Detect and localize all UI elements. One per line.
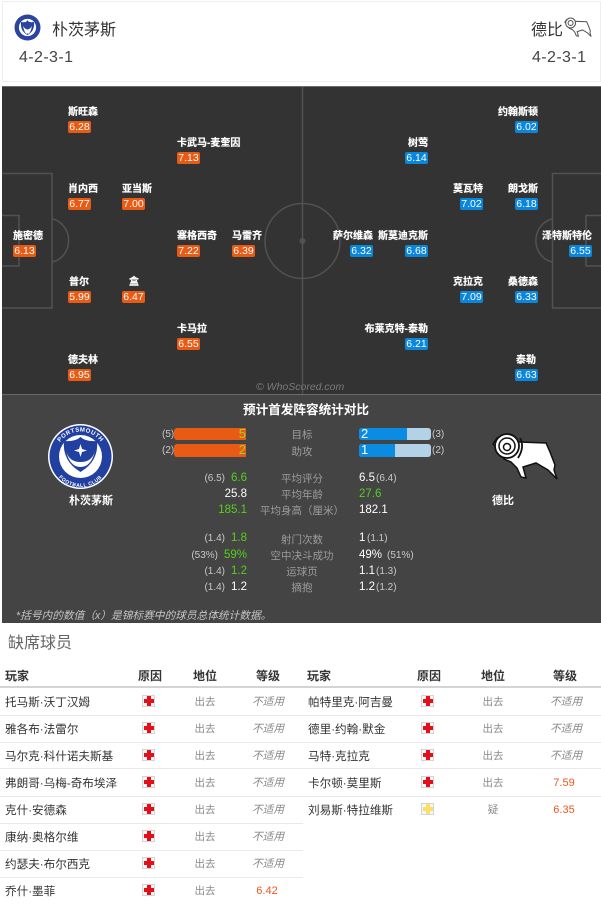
row: 帕特里克·阿吉曼: 不适用: [550, 696, 582, 708]
header: home table columns: [0, 662, 303, 688]
stat: dribbles: 1.2: [231, 565, 247, 577]
row: 约瑟夫·布尔西克: 出去: [194, 858, 216, 870]
player: 约翰斯顿: [498, 106, 538, 133]
stat: tackles: 摘抱: [292, 582, 312, 594]
row: 克什·安德森: 不适用: [252, 804, 284, 816]
row: 德里·约翰·默金: 出去: [482, 723, 504, 735]
row: 康纳·奥格尔维: 康纳·奥格尔维: [5, 831, 78, 844]
heading: stats title: 预计首发阵容统计对比: [243, 403, 369, 417]
player: 亚当斯: 7.00: [123, 198, 144, 210]
player: 卡马拉: 卡马拉: [177, 324, 207, 335]
row: 马尔克·科什诺夫斯基: [0, 742, 303, 769]
text: home formation: 4-2-3-1: [19, 49, 73, 66]
player: 施密德: 6.13: [14, 245, 35, 257]
row: 弗朗哥·乌梅-奇布埃泽: [0, 769, 303, 797]
panel: lineup stats comparison: [2, 395, 601, 623]
row: 帕特里克·阿吉曼: [303, 688, 601, 716]
stat: average rating: (6.4): [376, 473, 397, 484]
player: 施密德: [13, 230, 44, 257]
header cell: rating: 等级: [553, 669, 577, 683]
row: 马尔克·科什诺夫斯基: 出去: [194, 750, 216, 762]
player: 桑德森: 6.33: [516, 291, 537, 303]
player: 克拉克: [453, 276, 483, 303]
player: 斯莫迪克斯: 6.68: [406, 245, 427, 257]
player: 约翰斯顿: 6.02: [516, 121, 537, 133]
text: away formation: 4-2-3-1: [532, 49, 586, 66]
icon: Derby ram large: [492, 433, 558, 480]
row: 约瑟夫·布尔西克: 不适用: [252, 858, 284, 870]
player: 卡马拉: [177, 322, 208, 350]
row: 约瑟夫·布尔西克: [0, 850, 303, 878]
header cell: reason: 原因: [138, 669, 162, 683]
header: away table columns: [303, 662, 601, 688]
row: 乔什·墨菲: 出去: [194, 885, 216, 897]
player: 布莱克特-泰勒: [364, 322, 428, 350]
row: 克什·安德森: 克什·安德森: [5, 804, 67, 817]
text: home team label: 朴茨茅斯: [69, 495, 113, 507]
row: 弗朗哥·乌梅-奇布埃泽: 弗朗哥·乌梅-奇布埃泽: [5, 777, 117, 790]
player: 泰勒: [515, 354, 538, 381]
player: 肖内西: [68, 182, 98, 210]
row: 乔什·墨菲: 6.42: [256, 885, 278, 897]
player: 桑德森: 桑德森: [508, 277, 538, 288]
stat: dribbles: 1.1: [359, 565, 375, 577]
row: 雅各布·法雷尔: [0, 715, 303, 743]
row: 托马斯·沃丁汉姆: 出去: [194, 696, 216, 708]
row: 乔什·墨菲: 乔什·墨菲: [5, 885, 55, 898]
stat: average rating: (6.5): [204, 473, 225, 484]
stat: average rating: 6.6: [231, 472, 247, 484]
row: 刘易斯·特拉维斯: 刘易斯·特拉维斯: [308, 804, 393, 817]
panel: match header: [2, 1, 601, 82]
player: 塞格西奇: [177, 230, 217, 257]
stat: average height: 182.1: [359, 504, 388, 516]
player: 马雷齐: 6.39: [233, 245, 254, 257]
player: 普尔: [68, 276, 91, 303]
label: assists: 助攻: [292, 446, 312, 458]
row: 马特·克拉克: 出去: [482, 750, 504, 762]
player: 萨尔维森: 萨尔维森: [333, 231, 373, 242]
stat: aerial duels: (51%): [387, 550, 414, 561]
stat: tackles: (1.2): [376, 582, 397, 593]
bar: goals home: [162, 426, 246, 441]
player: 泽特斯特伦: [542, 230, 592, 257]
player: 布莱克特-泰勒: 6.21: [406, 338, 427, 350]
icon: Portsmouth crest small: [14, 14, 40, 40]
row: 刘易斯·特拉维斯: 疑: [488, 804, 498, 816]
header cell: status: 地位: [481, 669, 505, 683]
stat: average age: 25.8: [225, 488, 247, 500]
row: 雅各布·法雷尔: 出去: [194, 723, 216, 735]
text: WhoScored watermark: © WhoScored.com: [256, 381, 344, 393]
bar: assists home: [162, 442, 246, 457]
player: 树莺: 6.14: [406, 152, 427, 164]
bar: goals away: [359, 426, 444, 441]
row: 托马斯·沃丁汉姆: [0, 688, 303, 716]
player: 布莱克特-泰勒: 布莱克特-泰勒: [365, 324, 428, 335]
bar: goals away: (3): [432, 429, 444, 440]
row: 马尔克·科什诺夫斯基: 不适用: [252, 750, 284, 762]
player: 普尔: 普尔: [69, 277, 89, 288]
player: 马雷齐: [232, 230, 262, 257]
stat: average rating: [204, 472, 397, 485]
player: 泰勒: 泰勒: [516, 355, 536, 366]
row: 德里·约翰·默金: 不适用: [550, 723, 582, 735]
player: 斯旺森: [68, 106, 98, 133]
row: 约瑟夫·布尔西克: 约瑟夫·布尔西克: [5, 858, 90, 871]
player: 卡武马-麦奎因: 卡武马-麦奎因: [177, 138, 240, 149]
stat: shots: 1: [359, 532, 365, 544]
stat: aerial duels: 空中决斗成功: [270, 550, 334, 562]
player: 朗戈斯: 6.18: [516, 198, 537, 210]
player: 盒: 6.47: [123, 291, 144, 303]
stat: tackles: 1.2: [231, 581, 247, 593]
row: 雅各布·法雷尔: 雅各布·法雷尔: [5, 723, 78, 736]
player: 马雷齐: 马雷齐: [232, 231, 262, 242]
player: 肖内西: 肖内西: [68, 184, 98, 195]
player: 盒: [122, 276, 145, 303]
bar: assists home: 2: [239, 442, 246, 457]
row: 托马斯·沃丁汉姆: 托马斯·沃丁汉姆: [5, 696, 90, 709]
row: 德里·约翰·默金: 德里·约翰·默金: [308, 723, 385, 736]
row: 克什·安德森: [0, 796, 303, 824]
heading: home team name: 朴茨茅斯: [52, 22, 116, 39]
panel: pitch: [2, 86, 601, 395]
row: 康纳·奥格尔维: 不适用: [252, 831, 284, 843]
player: 盒: 盒: [129, 277, 139, 288]
row: 卡尔顿·莫里斯: 出去: [482, 777, 504, 789]
header cell: player: 玩家: [307, 669, 331, 683]
bar: assists away: 1: [361, 442, 368, 457]
player: 塞格西奇: 7.22: [178, 245, 199, 257]
bar: assists away: (2): [432, 445, 444, 456]
player: 亚当斯: 亚当斯: [122, 184, 152, 195]
row: 马特·克拉克: 不适用: [550, 750, 582, 762]
stat: average height: [218, 504, 388, 517]
stat: aerial duels: 49%: [359, 549, 382, 561]
row: 卡尔顿·莫里斯: 卡尔顿·莫里斯: [308, 777, 381, 790]
stat: average height: 平均身高（厘米）: [260, 505, 344, 517]
row: 德里·约翰·默金: [303, 715, 601, 743]
stat: aerial duels: [191, 549, 414, 562]
text: footnote: *括号内的数值（x）是锦标赛中的球员总体统计数据。: [16, 610, 271, 622]
player: 塞格西奇: 塞格西奇: [177, 231, 217, 242]
stat: shots: [204, 532, 388, 546]
player: 朗戈斯: 朗戈斯: [508, 184, 538, 195]
label: goals: 目标: [292, 429, 312, 441]
stat: dribbles: [204, 565, 397, 578]
stat: shots: 射门次数: [281, 534, 323, 546]
player: 桑德森: [508, 276, 538, 303]
icon: Derby ram small: [564, 18, 592, 37]
icon: Portsmouth crest large: [48, 424, 113, 489]
player: 莫瓦特: [453, 182, 484, 210]
heading: away team name: 德比: [531, 22, 563, 39]
row: 卡尔顿·莫里斯: 7.59: [553, 777, 575, 789]
stat: tackles: (1.4): [204, 582, 225, 593]
player: 卡武马-麦奎因: 7.13: [178, 152, 199, 164]
player: 德夫林: [68, 354, 98, 381]
row: 弗朗哥·乌梅-奇布埃泽: 不适用: [252, 777, 284, 789]
row: 托马斯·沃丁汉姆: 不适用: [252, 696, 284, 708]
stat: shots: 1.8: [231, 532, 247, 544]
heading: missing players: 缺席球员: [8, 635, 72, 652]
row: 帕特里克·阿吉曼: 出去: [482, 696, 504, 708]
stat: dribbles: (1.4): [204, 566, 225, 577]
player: 克拉克: 7.09: [461, 291, 482, 303]
row: 弗朗哥·乌梅-奇布埃泽: 出去: [194, 777, 216, 789]
player: 斯莫迪克斯: 斯莫迪克斯: [378, 231, 428, 242]
stat: average rating: 平均评分: [281, 473, 323, 485]
header cell: reason: 原因: [417, 669, 441, 683]
stat: average age: [225, 488, 381, 501]
player: 德夫林: 德夫林: [68, 355, 98, 366]
stat: dribbles: 运球页: [286, 566, 318, 578]
player: 斯莫迪克斯: [378, 230, 428, 257]
bar: assists away: [359, 442, 444, 457]
stat: shots: (1.4): [204, 533, 225, 544]
bar: goals home: (5): [162, 429, 174, 440]
player: 莫瓦特: 莫瓦特: [453, 184, 483, 195]
stat: average age: 平均年龄: [281, 489, 323, 501]
row: 康纳·奥格尔维: [0, 823, 303, 851]
player: 卡武马-麦奎因: [177, 136, 240, 164]
player: 肖内西: 6.77: [69, 198, 90, 210]
player: 泰勒: 6.63: [516, 369, 537, 381]
stat: average height: 185.1: [218, 504, 247, 516]
row: 马尔克·科什诺夫斯基: 马尔克·科什诺夫斯基: [5, 750, 113, 763]
player: 树莺: 树莺: [408, 138, 428, 149]
row: 卡尔顿·莫里斯: [303, 769, 601, 797]
row: 刘易斯·特拉维斯: 6.35: [553, 804, 575, 816]
stat: average rating: 6.5: [359, 472, 375, 484]
player: 莫瓦特: 7.02: [461, 198, 482, 210]
stat: shots: (1.1): [367, 533, 388, 544]
header cell: player: 玩家: [5, 669, 29, 683]
icon: Portsmouth crest large: FOOTBALL CLUB: [59, 475, 102, 487]
row: 康纳·奥格尔维: 出去: [194, 831, 216, 843]
player: 朗戈斯: [508, 182, 538, 210]
row: 马特·克拉克: 马特·克拉克: [308, 750, 370, 763]
player: 约翰斯顿: 约翰斯顿: [498, 107, 538, 118]
row: 刘易斯·特拉维斯: [308, 803, 575, 817]
bar: goals home: 5: [239, 426, 246, 441]
row: 乔什·墨菲: [5, 884, 278, 898]
stat: average age: 27.6: [359, 488, 381, 500]
row: 克什·安德森: 出去: [194, 804, 216, 816]
stat: tackles: 1.2: [359, 581, 375, 593]
player: 斯旺森: 斯旺森: [68, 107, 98, 118]
stat: aerial duels: (53%): [191, 550, 218, 561]
stat: tackles: [204, 581, 397, 594]
player: 德夫林: 6.95: [69, 369, 90, 381]
stat: aerial duels: 59%: [224, 549, 247, 561]
player: 萨尔维森: [333, 230, 373, 257]
player: 克拉克: 克拉克: [453, 277, 483, 288]
player: 泽特斯特伦: 6.55: [570, 245, 591, 257]
player: 普尔: 5.99: [69, 291, 90, 303]
header cell: rating: 等级: [256, 669, 280, 683]
player: 萨尔维森: 6.32: [351, 245, 372, 257]
text: away team label: 德比: [492, 495, 514, 507]
bar: assists home: (2): [162, 445, 174, 456]
player: 树莺: [405, 136, 428, 164]
player: 斯旺森: 6.28: [69, 121, 90, 133]
header cell: status: 地位: [193, 669, 217, 683]
row: 雅各布·法雷尔: 不适用: [252, 723, 284, 735]
bar: goals away: 2: [361, 426, 368, 441]
player: 施密德: 施密德: [13, 231, 43, 242]
row: 马特·克拉克: [303, 742, 601, 769]
row: 帕特里克·阿吉曼: 帕特里克·阿吉曼: [308, 696, 393, 709]
stat: dribbles: (1.3): [376, 566, 397, 577]
icon: Portsmouth crest large: PORTSMOUTH: [57, 427, 104, 442]
player: 泽特斯特伦: 泽特斯特伦: [542, 231, 592, 242]
player: 亚当斯: [122, 182, 152, 210]
player: 卡马拉: 6.55: [178, 338, 199, 350]
